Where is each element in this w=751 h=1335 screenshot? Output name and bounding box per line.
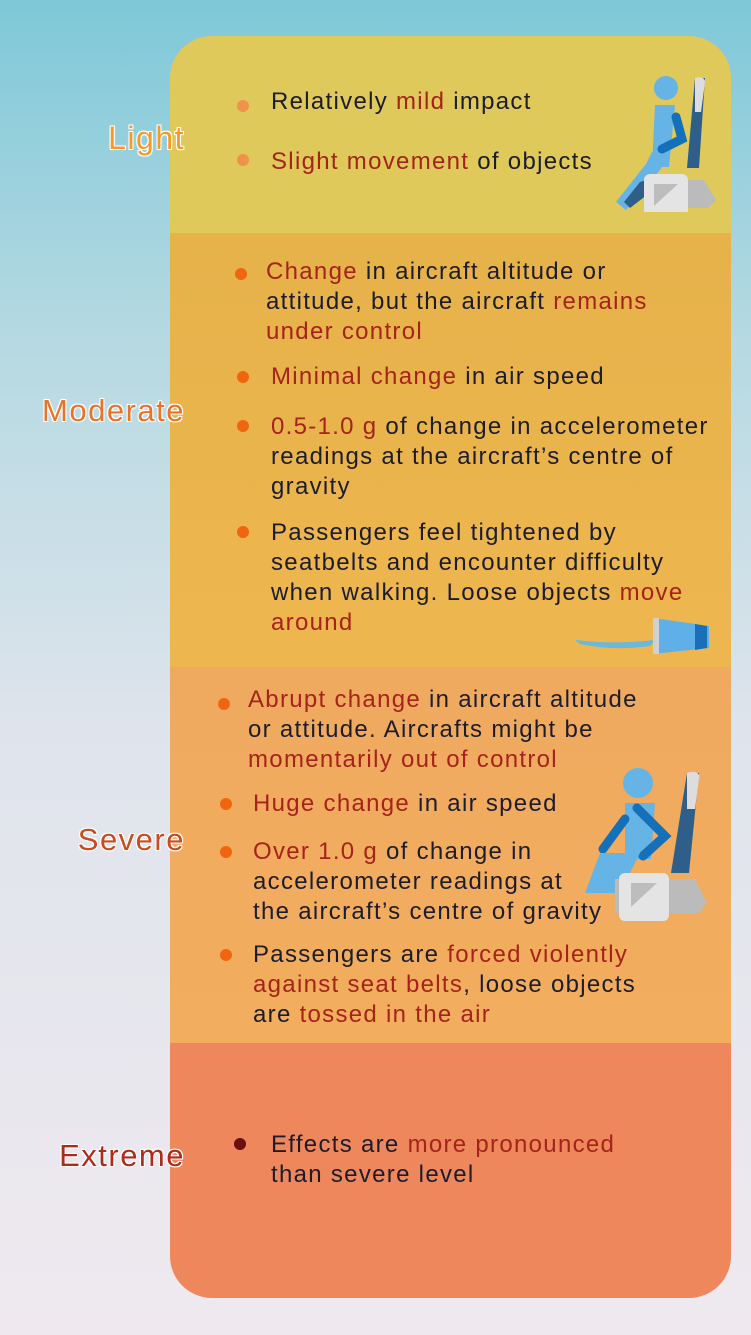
- bullet: extreme 1: Effects are more pronounced: [271, 1131, 615, 1158]
- bullet: moderate 4: around: [271, 609, 354, 636]
- bullet: moderate 1: Change in aircraft altitude or: [266, 258, 607, 285]
- bullet: moderate 3: [271, 413, 709, 500]
- bullet: moderate 4: when walking. Loose objects move: [271, 579, 683, 606]
- bullet: moderate 3: gravity: [271, 473, 351, 500]
- panel: turbulence levels: [170, 36, 731, 1298]
- bullet: severe 4: against seat belts, loose objects: [253, 971, 636, 998]
- section: extreme: [170, 1043, 731, 1298]
- bullet: severe 1: Abrupt change in aircraft altitude: [248, 686, 638, 713]
- bullet: moderate 1: under control: [266, 318, 423, 345]
- icon: seated passenger light: [616, 76, 716, 212]
- bullet: severe 1: [248, 686, 638, 773]
- bullet: severe 4: [253, 941, 636, 1028]
- label: Extreme: Extreme: [59, 1138, 185, 1173]
- bullet: severe 4: are tossed in the air: [253, 1001, 491, 1028]
- bullet: severe 1: momentarily out of control: [248, 746, 558, 773]
- bullet: severe 4: Passengers are forced violently: [253, 941, 628, 968]
- bullet: moderate 1: attitude, but the aircraft remains: [266, 288, 648, 315]
- section: moderate: [170, 233, 731, 667]
- bullet: light 1: Relatively mild impact: [271, 88, 532, 115]
- bullet: severe 3: [253, 838, 602, 925]
- bullet: severe 2: Huge change in air speed: [253, 790, 558, 817]
- bullet: severe 3: Over 1.0 g of change in: [253, 838, 532, 865]
- bullet dots: [218, 100, 249, 1150]
- icon: spilled cup: [575, 618, 709, 654]
- bullet: severe 1: or attitude. Aircrafts might be: [248, 716, 594, 743]
- icon: seated passenger severe: [585, 768, 707, 921]
- bullet: severe 3: the aircraft’s centre of gravity: [253, 898, 602, 925]
- bullet: moderate 4: [271, 519, 683, 636]
- label: Severe: Severe: [78, 822, 185, 857]
- bullet: light 2: Slight movement of objects: [271, 148, 593, 175]
- bullet: extreme 1: [271, 1131, 615, 1188]
- bullet: moderate 3: 0.5-1.0 g of change in accelerometer: [271, 413, 709, 440]
- bullet: moderate 4: Passengers feel tightened by: [271, 519, 617, 546]
- bullet: moderate 1: [266, 258, 648, 345]
- label: Moderate: Moderate: [42, 393, 185, 428]
- section: severe: [170, 667, 731, 1043]
- bullet: severe 3: accelerometer readings at: [253, 868, 563, 895]
- label: Light: Light: [108, 120, 185, 156]
- bullet: moderate 2: Minimal change in air speed: [271, 363, 605, 390]
- bullet: moderate 4: seatbelts and encounter difficulty: [271, 549, 664, 576]
- bullet: extreme 1: than severe level: [271, 1161, 475, 1188]
- section: light: [170, 36, 731, 233]
- bullet: moderate 3: readings at the aircraft’s centre of: [271, 443, 674, 470]
